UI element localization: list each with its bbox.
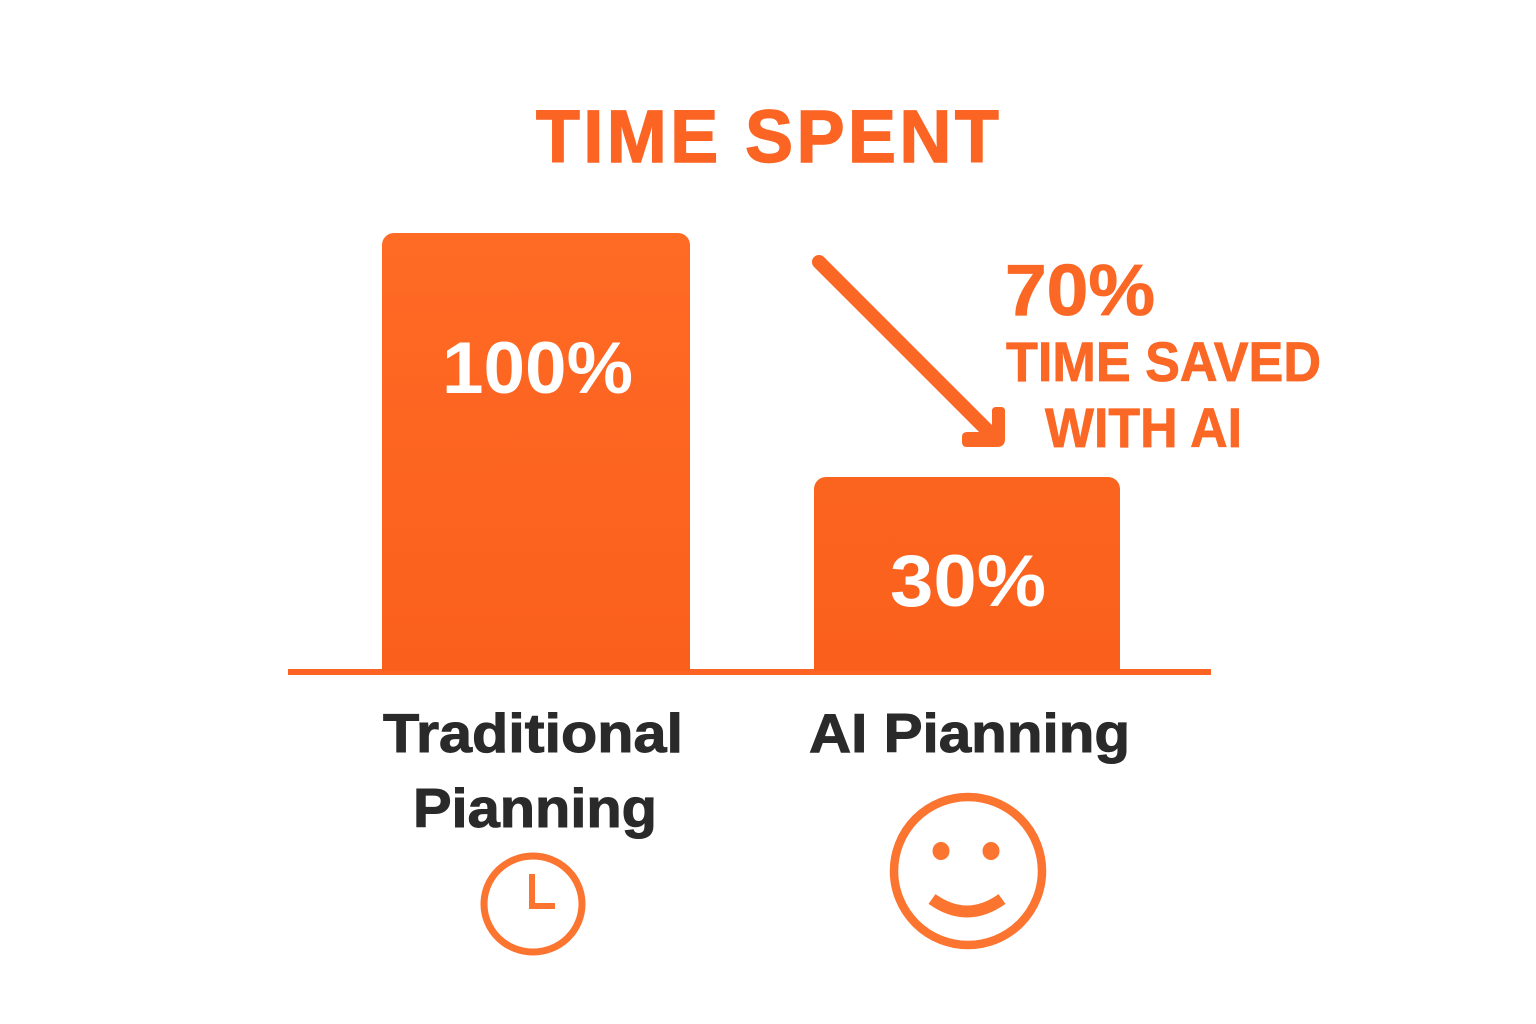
callout line 1: TIME SAVED [1006,330,1321,393]
arrow: down to AI bar [819,262,1005,447]
label: traditional planning: Traditional [383,702,683,764]
callout line 2: WITH AI [1045,396,1242,459]
icon: clock [484,856,582,952]
callout number: 70% [1005,251,1155,331]
bar value: 30%: 30% [890,541,1046,622]
icon: smiley face [894,797,1042,945]
label: traditional planning: Pianning [413,777,657,839]
label: traditional planning [383,702,683,839]
callout: 70% time saved with AI [1005,251,1321,459]
baseline axis [288,669,1211,675]
label: AI planning: AI Pianning [809,702,1130,764]
bar: AI planning 30% [814,477,1120,671]
bar value: 100%: 100% [442,328,633,409]
bar: traditional planning 100% [382,233,690,671]
title: TIME SPENT [536,96,999,178]
